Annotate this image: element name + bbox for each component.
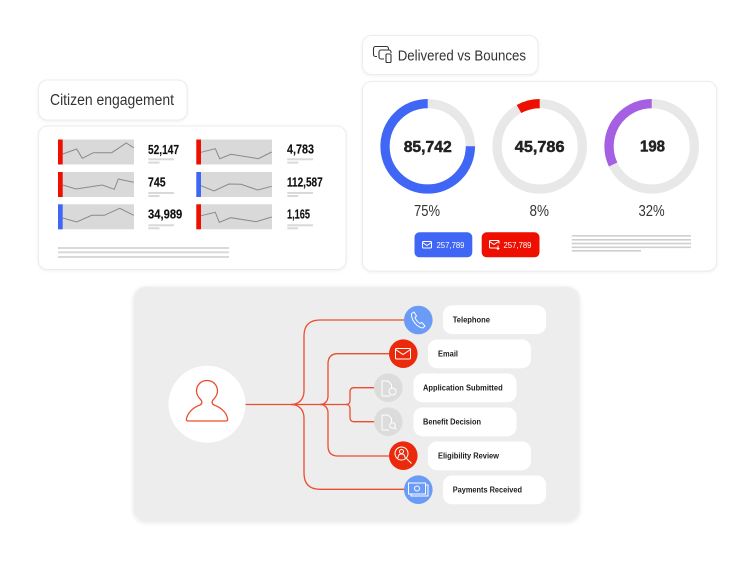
node: Benefit Decision: [374, 407, 516, 436]
donut chart: 85,742: 75%: [414, 203, 440, 220]
icon: bounced envelope: [490, 240, 499, 250]
node: Eligibility Review: Eligibility Review: [438, 452, 500, 461]
sparkline row: 34,989: 34,989: [148, 207, 182, 221]
sparkline row: 4,783: 4,783: [287, 142, 314, 156]
panel: contact journey: [134, 287, 579, 521]
icon: telephone: [411, 312, 425, 328]
donut chart: 198: [609, 104, 694, 220]
panel: citizen engagement: [38, 126, 346, 270]
icon: envelope: [422, 242, 432, 248]
button: bounced count: [482, 232, 540, 257]
node: Telephone: [404, 305, 546, 334]
placeholder text lines: [58, 247, 229, 258]
icon: person magnifier: [395, 447, 412, 464]
heading: Citizen engagement: Citizen engagement: [50, 92, 175, 109]
button: delivered count: [414, 232, 472, 257]
connector lines: [245, 320, 405, 489]
sparkline row: 4,783: [196, 140, 314, 164]
node: Application Submitted: [374, 373, 516, 402]
node: Application Submitted: Application Submitted: [423, 384, 503, 393]
sparkline row: 112,587: [196, 172, 323, 197]
node: Telephone: Telephone: [453, 316, 491, 325]
donut chart: 45,786: 8%: [530, 203, 549, 220]
button: delivered count: 257,789: [436, 240, 465, 250]
node: Email: Email: [438, 350, 458, 359]
node: Email: [389, 339, 531, 368]
donut chart: 198: 32%: [638, 203, 665, 220]
donut chart: 198: 198: [640, 138, 665, 156]
donut chart: 45,786: [497, 104, 582, 220]
heading: Citizen engagement: [38, 80, 187, 120]
node: Payments Received: Payments Received: [453, 486, 522, 495]
icon: envelope: [396, 348, 410, 359]
icon: citizen avatar: [168, 366, 246, 443]
node: Benefit Decision: Benefit Decision: [423, 418, 481, 427]
icon: banknotes: [408, 483, 428, 496]
button: bounced count: 257,789: [504, 240, 532, 250]
heading: Delivered vs Bounces: [362, 36, 538, 74]
sparkline row: 52,147: [58, 140, 179, 164]
panel: delivered vs bounces: [362, 82, 716, 271]
placeholder text lines: [572, 235, 691, 252]
sparkline row: 1,165: [196, 204, 313, 229]
heading: Delivered vs Bounces: Delivered vs Bounces: [398, 48, 526, 64]
sparkline row: 1,165: 1,165: [287, 207, 310, 221]
donut chart: 85,742: [385, 104, 470, 220]
icon: document search: [382, 415, 396, 430]
icon: devices: [374, 46, 391, 62]
donut chart: 45,786: 45,786: [515, 139, 565, 156]
node: Eligibility Review: [389, 441, 531, 470]
sparkline row: 52,147: 52,147: [148, 143, 179, 157]
sparkline row: 745: [58, 172, 174, 197]
donut chart: 85,742: 85,742: [404, 139, 452, 156]
sparkline row: 745: 745: [148, 175, 166, 189]
node: Payments Received: [404, 475, 546, 504]
icon: document check: [382, 381, 396, 396]
sparkline row: 34,989: [58, 204, 182, 229]
sparkline row: 112,587: 112,587: [287, 175, 323, 189]
